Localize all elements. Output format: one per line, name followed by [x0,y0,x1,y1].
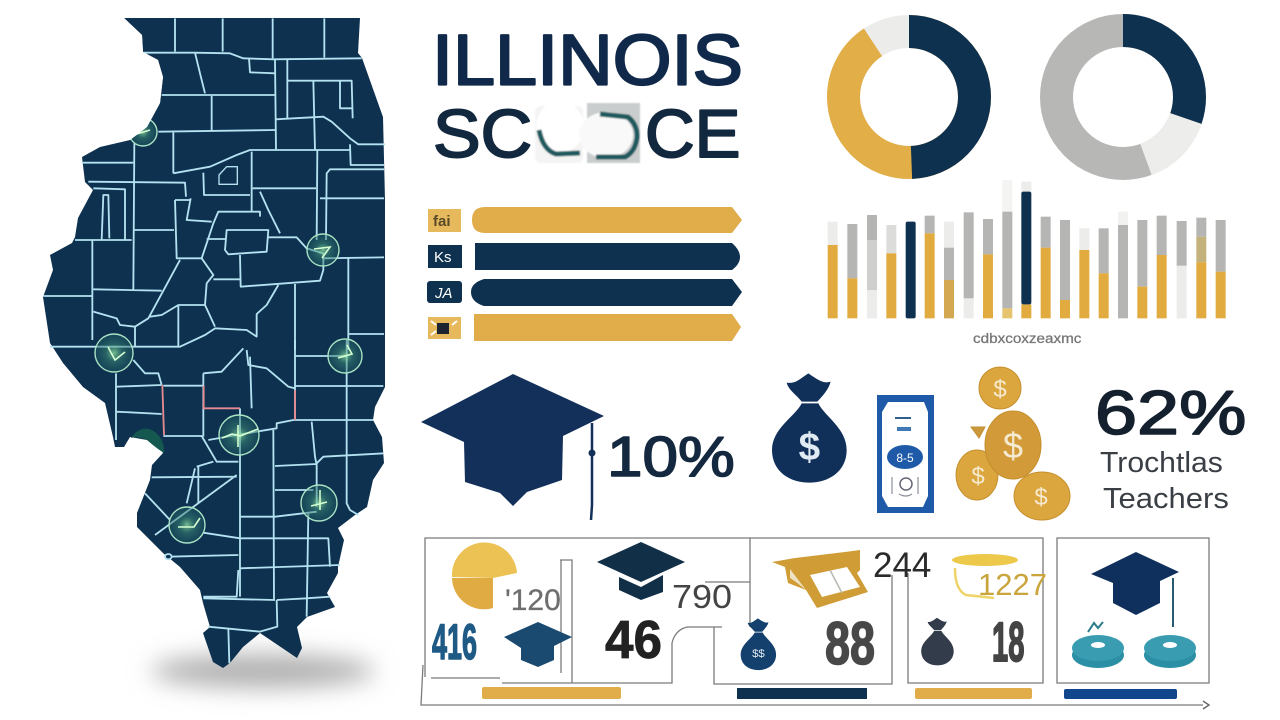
pie icon [452,542,517,609]
donut chart 1 [844,32,974,162]
icon: gold coin bags [956,367,1070,520]
value: 416: 416 [432,614,477,670]
value: 120: '120 [505,584,561,617]
notch shading at river bend [131,429,164,453]
value: 790: 790 [672,579,732,616]
horizontal bars [427,207,742,341]
legend bar gold right [915,688,1032,699]
bottom panel frames [421,538,1209,705]
title: CE: CE [645,96,740,172]
icon: gold coin bags: $ [971,463,985,490]
gold cup [952,554,1018,598]
bar icon 4 [428,317,461,339]
bar icon 2: Ks [434,249,452,266]
label: Trochtlas: Trochtlas [1100,447,1223,479]
hub sparks [108,130,352,527]
title: ILLINOIS: ILLINOIS [432,21,743,100]
value: 46: 46 [605,610,662,670]
value: 1227: 1227 [978,567,1047,602]
bar icon 3: JA [434,285,453,302]
icon: gold coin bags: $ [1003,425,1023,466]
small cap [504,622,572,667]
bar 1 [472,207,742,233]
dark bag [921,618,954,665]
icon: gold coin bags: $ [1034,484,1048,511]
map of Illinois [43,17,385,668]
icon: money bag [772,373,847,483]
navy cap [1091,552,1179,627]
bar icon 1: fai [433,213,451,230]
icon: banknote [877,395,934,513]
bar 2 [475,243,740,270]
chart caption: cdbxcoxzeaxmc [973,332,1081,347]
stacked column chart [828,180,1226,318]
donut chart 2 [1056,30,1190,164]
value: 18: 18 [992,612,1024,674]
stat: 62%: 62% [1095,378,1246,447]
legend bar navy [737,688,867,699]
bar 3 [471,279,742,306]
legend bar blue [1064,689,1177,699]
bar icon 1 [428,209,461,232]
teal discs [1072,622,1196,668]
arrow end marker [1203,701,1209,709]
bar icon 3 [427,281,462,303]
dark blob value: 88 [825,611,875,678]
bar icon 2 [428,245,462,268]
value: 244: 244 [873,546,931,585]
cap top [597,542,685,600]
glowing city hubs [95,118,362,543]
southern county lines [116,340,383,663]
map shadow [151,654,375,688]
map outline [43,18,385,668]
icon: gold coin bags: $ [993,376,1007,403]
northern county lines [43,18,385,350]
gold book icon [772,550,868,608]
graduation cap large [421,374,604,520]
blue bag [741,618,776,670]
icon: money bag: $ [799,426,820,469]
label: Teachers: Teachers [1103,483,1229,515]
bar 4 [474,314,741,341]
white mask west of the map edge [100,17,163,140]
blue bag: $$ [752,648,765,660]
legend bar gold left [482,687,621,699]
title: SC: SC [433,96,532,172]
icon: banknote: 8-5 [896,451,914,465]
stat: 10%: 10% [607,424,735,488]
title: smudged letters [535,101,640,163]
